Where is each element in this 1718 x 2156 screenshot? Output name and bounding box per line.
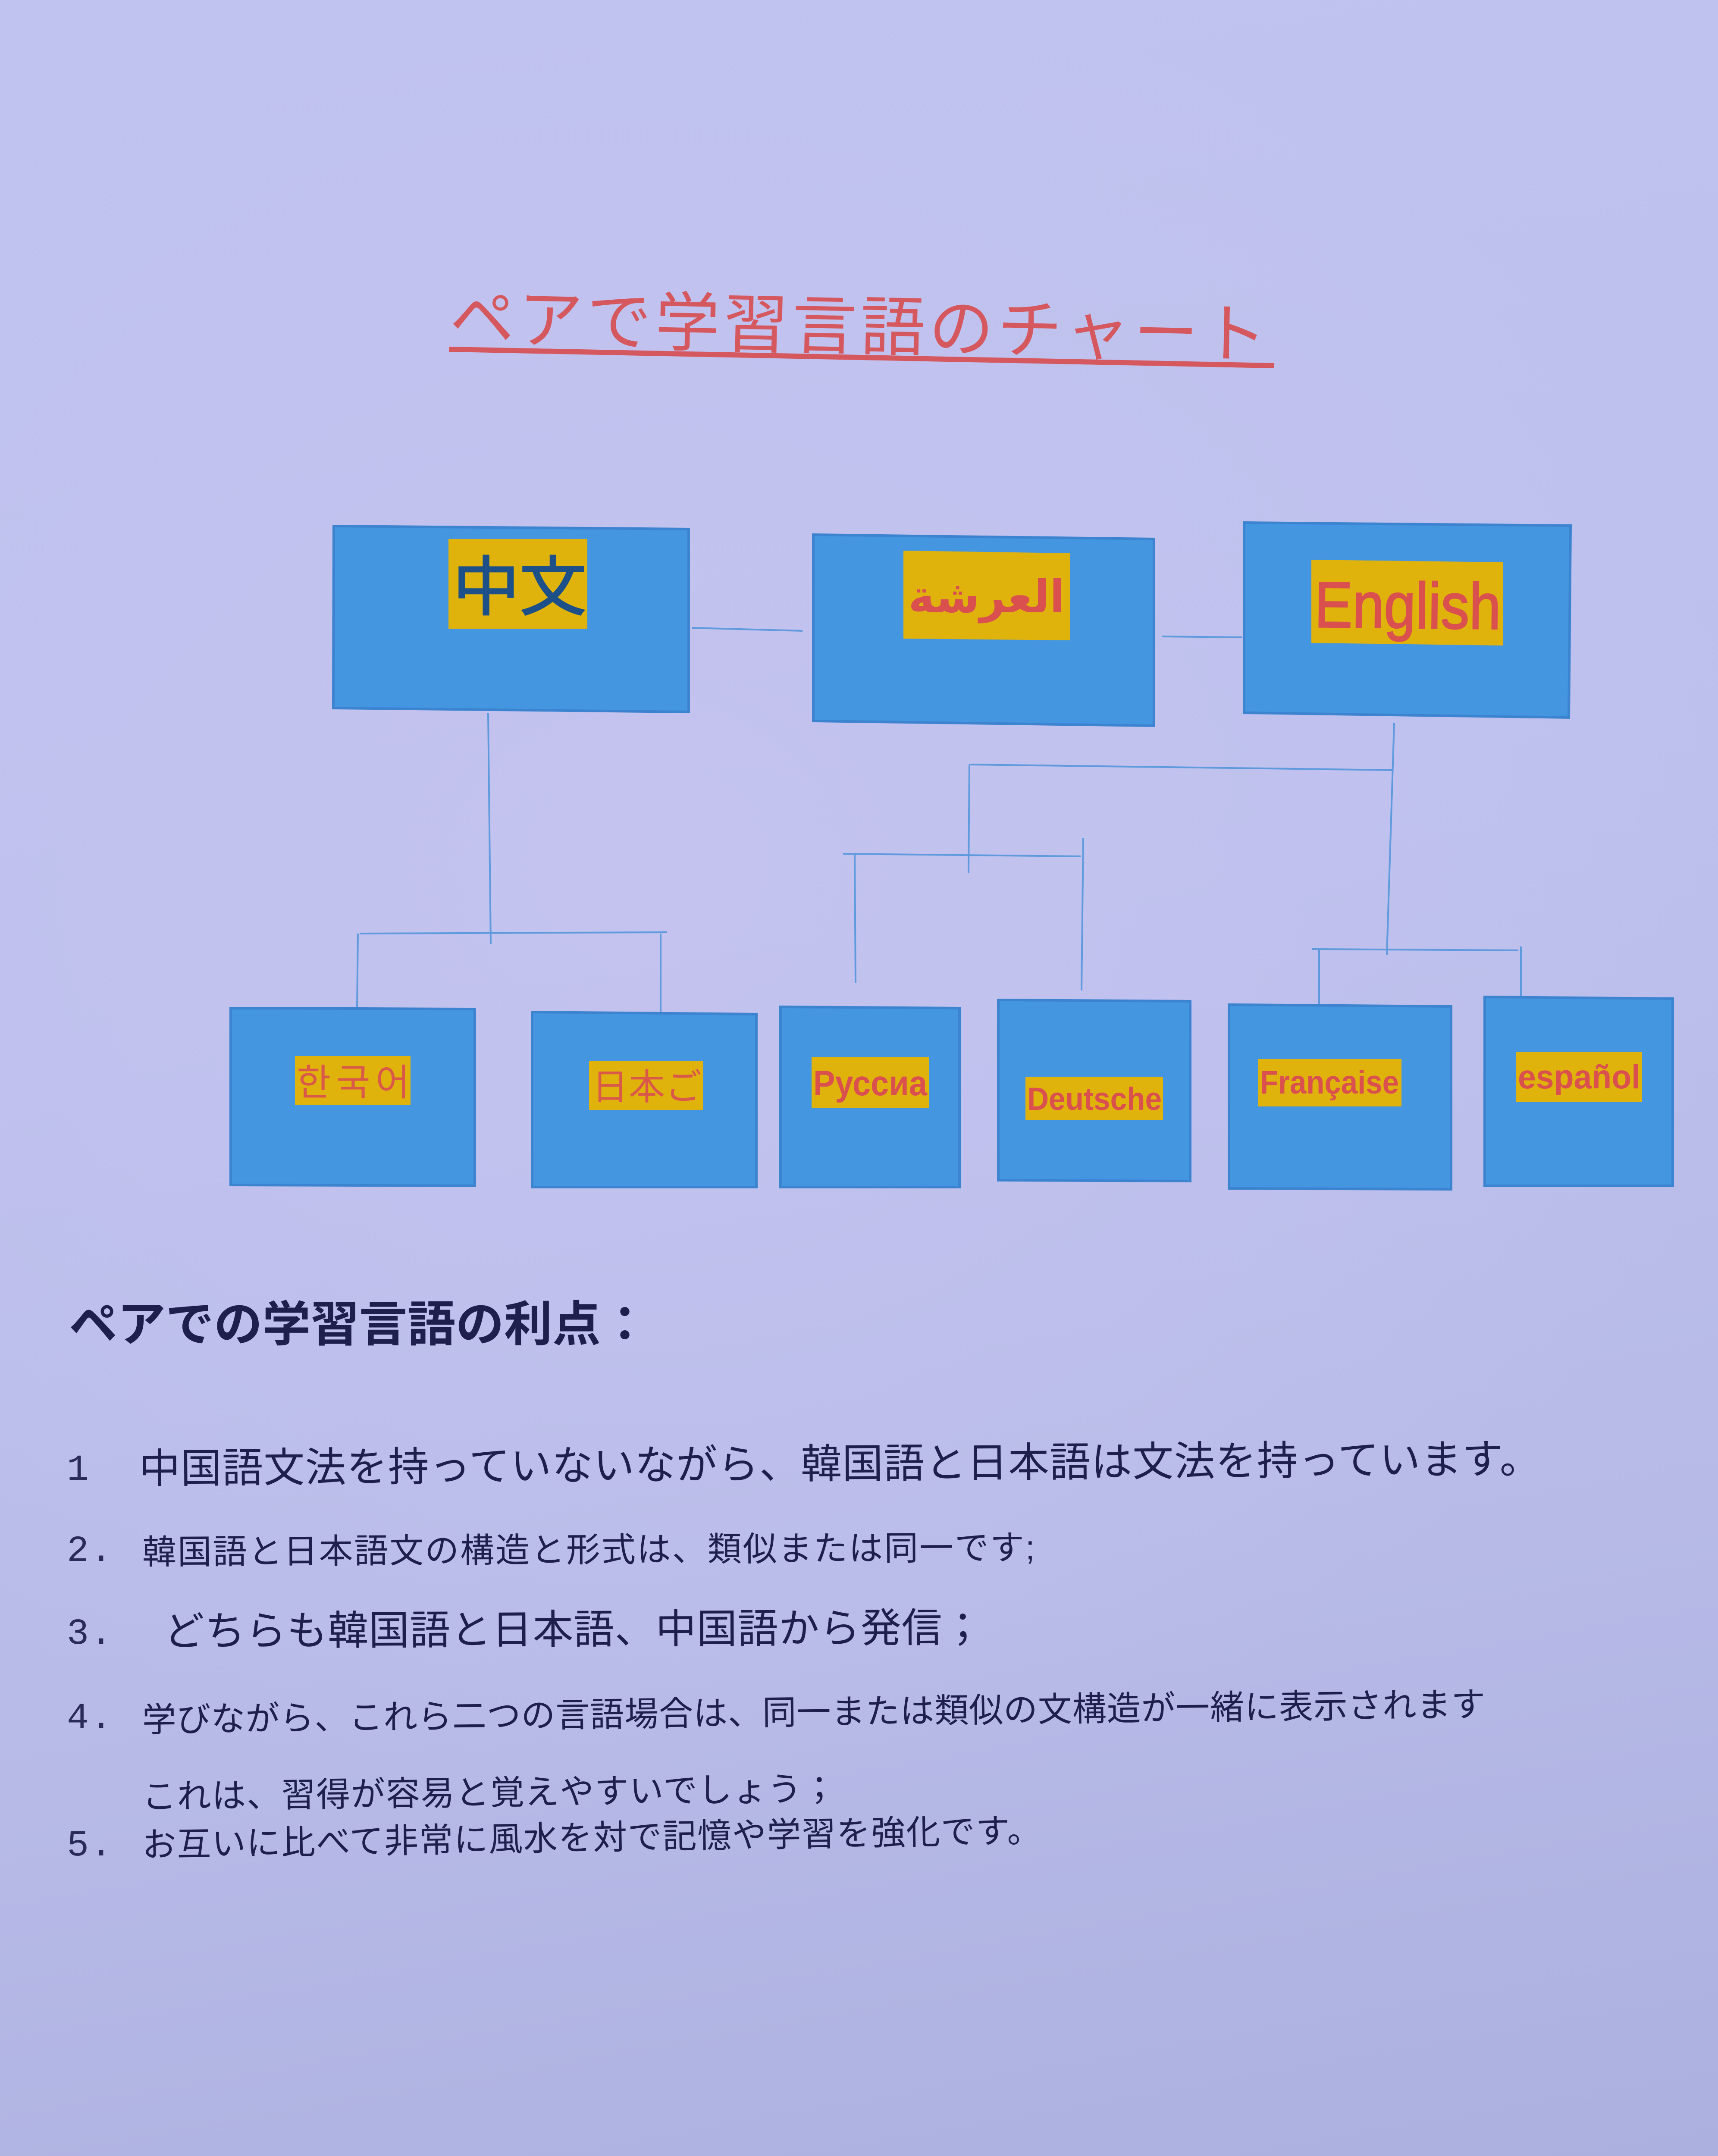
box: Chinese: 中文: [453, 551, 586, 624]
item 2: 2.: [67, 1530, 112, 1572]
box: Korean: 한국어: [297, 1062, 410, 1103]
box: German: [998, 1000, 1190, 1181]
item 5: お互いに比べて非常に風水を対で記憶や学習を強化です。: [142, 1811, 1041, 1864]
box: Korean: [231, 1008, 475, 1186]
item 3: 3.: [67, 1613, 112, 1655]
item 4: これは、習得が容易と覚えやすいでしょう；: [142, 1769, 837, 1816]
item 1: 1: [67, 1449, 89, 1491]
box: Japanese: [532, 1012, 756, 1187]
item 5: 5.: [67, 1825, 112, 1867]
box: Spanish: español: [1518, 1058, 1640, 1096]
connector lines: [357, 628, 1521, 1012]
flowchart: [231, 523, 1673, 1189]
box: French: [1229, 1005, 1451, 1189]
box: Chinese: [333, 526, 689, 712]
box: Russian: Руссиа: [813, 1064, 928, 1103]
box: German: Deutsche: [1027, 1081, 1162, 1117]
title: ペアで学習言語のチャート: [449, 282, 1267, 371]
box: French: Française: [1260, 1064, 1399, 1101]
item 2: 韓国語と日本語文の構造と形式は、類似または同一です;: [142, 1528, 1035, 1571]
benefits heading: ペアでの学習言語の利点：: [69, 1297, 649, 1351]
box: Arabic: العرشة: [908, 570, 1065, 623]
item 4: 4.: [67, 1698, 112, 1739]
item 3: どちらも韓国語と日本語、中国語から発信；: [164, 1605, 983, 1654]
item 1: 中国語文法を持っていないながら、韓国語と日本語は文法を持っています。: [139, 1436, 1541, 1492]
benefits list: [67, 1436, 1541, 1867]
box: Arabic: [813, 535, 1154, 726]
item 4: 学びながら、これら二つの言語場合は、同一または類似の文構造が一緒に表示されます: [142, 1685, 1486, 1739]
box: Russian: [781, 1007, 959, 1187]
box: English: English: [1314, 568, 1501, 643]
box: Spanish: [1485, 997, 1673, 1186]
item 4: [67, 1685, 1486, 1816]
box: English: [1244, 523, 1571, 718]
box: Japanese: 日本ご: [592, 1067, 702, 1107]
